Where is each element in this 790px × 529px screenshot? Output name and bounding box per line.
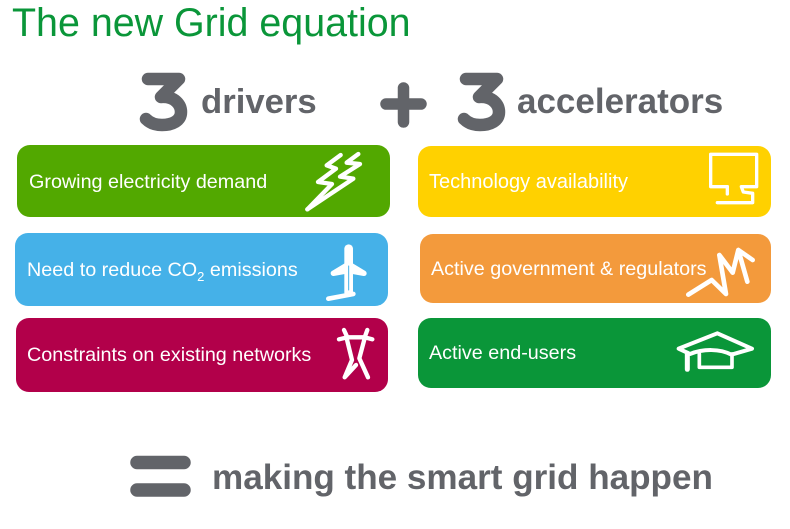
- panel: growing electricity demand: [17, 145, 390, 217]
- label: reduce CO2 emissions: Need to reduce CO2 emissions: [27, 259, 298, 284]
- heading: drivers: drivers: [201, 83, 317, 121]
- label: active government and regulators: Active government & regulators: [431, 258, 707, 280]
- tagline: making the smart grid happen: [212, 458, 713, 497]
- panel: active government and regulators: [420, 234, 771, 303]
- panel: technology availability: [418, 146, 771, 217]
- panel: constraints on existing networks: [16, 318, 388, 392]
- label: constraints on existing networks: Constraints on existing networks: [27, 344, 311, 366]
- panel: reduce CO2 emissions: [15, 233, 388, 306]
- label: active end-users: Active end-users: [429, 342, 576, 364]
- panel: active end-users: [418, 318, 771, 388]
- label: growing electricity demand: Growing electricity demand: [29, 171, 267, 193]
- title: The new Grid equation: [12, 1, 411, 45]
- heading: accelerators: accelerators: [517, 82, 723, 121]
- label: technology availability: Technology availability: [429, 171, 628, 193]
